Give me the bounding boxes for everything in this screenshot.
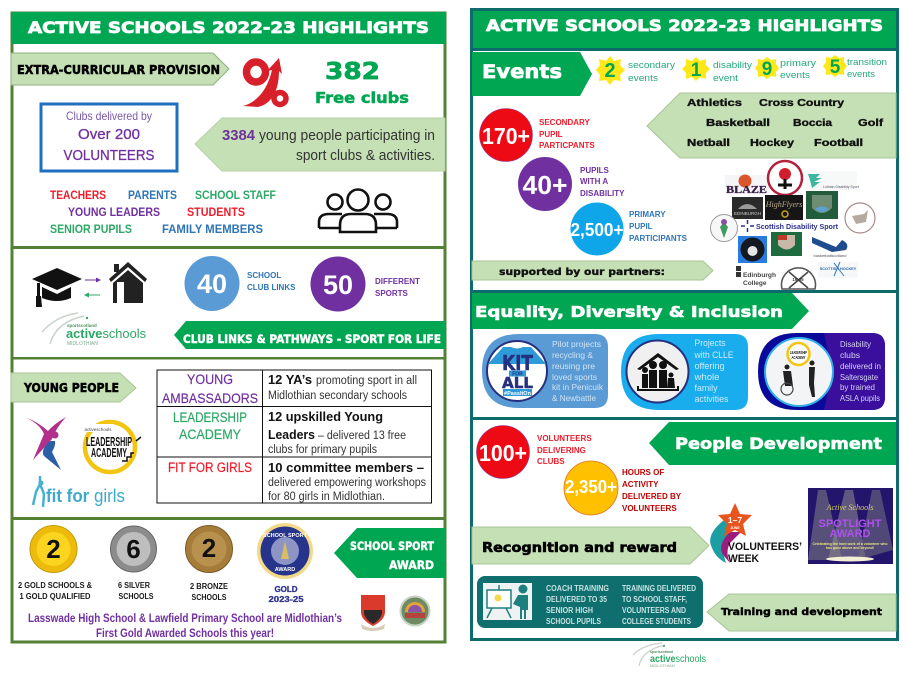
logo: volunteers week <box>710 503 802 565</box>
stat star: 9 primary events: primary <box>780 58 816 69</box>
divider band <box>11 357 446 360</box>
stat: 170+ secondary pupil participants <box>480 108 595 162</box>
stat star: 5 transition events: 5 <box>830 57 841 78</box>
logo: scottish hockey: SCOTTISH HOCKEY <box>820 267 857 271</box>
stat: 50 different sports: 50 <box>323 270 353 300</box>
logo: fit for girls: fit for girls <box>46 486 125 506</box>
heading arrow: school sport award: AWARD <box>389 558 434 572</box>
stat star: 5 transition events <box>823 55 887 80</box>
panel: club links and pathways <box>32 256 445 349</box>
logo: active schools midlothian: sportscotland <box>67 323 97 328</box>
heading arrow: young people <box>11 373 136 402</box>
card: kit for all: recycling & <box>552 350 593 360</box>
stat: 50 different sports: SPORTS <box>375 289 409 298</box>
stat star: 2 secondary events <box>596 56 675 85</box>
stat star: 2 secondary events: secondary <box>628 60 675 71</box>
logo: edinburgh college: Edinburgh <box>743 272 776 279</box>
logo: active schools footer: activeschools <box>650 654 706 665</box>
stat: 2,350+ hours of activity: ACTIVITY <box>622 480 659 489</box>
heading arrow: young people: YOUNG PEOPLE <box>23 381 119 395</box>
stat star: 1 disability event: 1 <box>691 60 702 81</box>
logo: basketball scotland <box>812 237 847 258</box>
card: kit for all: & Newbattle <box>552 393 596 403</box>
list: volunteer roles <box>50 190 276 236</box>
callout arrow: sports list <box>647 93 896 158</box>
row: leadership academy: clubs for primary pupils <box>268 444 377 456</box>
arrow: supported by our partners <box>472 261 713 280</box>
callout arrow: 3384 young people <box>195 118 445 171</box>
stat star: 5 transition events: events <box>847 69 875 80</box>
logo: active schools midlothian <box>42 313 146 347</box>
row: fit for girls: delivered empowering workshops <box>268 477 426 489</box>
stat: 2,350+ hours of activity <box>564 461 682 515</box>
image: spotlight award: Active Schools <box>826 503 873 512</box>
logo: high flyers: HighFlyers <box>765 200 802 209</box>
stat: 100+ volunteers delivering clubs: 100+ <box>479 440 527 466</box>
callout arrow: 3384 young people: sport clubs & activities. <box>296 148 435 164</box>
logo: volunteers week: JUNE <box>730 526 740 530</box>
callout arrow: 3384 young people: young people participating in <box>259 128 435 144</box>
medal labels: 2023-25 <box>268 595 304 604</box>
logo: blaze <box>725 174 770 196</box>
callout arrow: sports list: Athletics <box>687 98 743 109</box>
stat: 100+ volunteers delivering clubs: VOLUNTEERS <box>537 434 592 443</box>
card: training delivered: COACH TRAINING <box>546 584 609 593</box>
stat: 100+ volunteers delivering clubs: CLUBS <box>537 457 565 466</box>
badge: school sport award gold: AWARD <box>275 567 295 573</box>
statement: first gold awarded schools <box>28 611 342 640</box>
card: whole family activities: activities <box>694 394 729 404</box>
logo: basketball scotland: basketballscotland <box>814 253 846 258</box>
medal labels: 2 BRONZE <box>190 582 229 591</box>
panel: events <box>472 52 896 289</box>
callout: over 200 volunteers: VOLUNTEERS <box>64 147 154 164</box>
card: kit for all <box>482 334 608 408</box>
heading arrow: school sport award: SCHOOL SPORT <box>350 539 434 553</box>
row: leadership academy: LEADERSHIP <box>173 409 247 425</box>
medal: bronze <box>186 526 232 572</box>
partner logos <box>710 161 875 289</box>
arrow: supported by our partners: supported by our partners: <box>499 267 665 278</box>
left title banner <box>11 12 446 44</box>
stat: 2,500+ primary pupil participants: 2,500+ <box>570 220 624 240</box>
heading arrow: events: Events <box>482 61 562 83</box>
stat: 382 free clubs: Free clubs <box>315 89 409 107</box>
callout arrow: sports list: Basketball <box>706 118 770 129</box>
stat star: 9 primary events: events <box>780 70 810 81</box>
card: kit for all: Pilot projects <box>552 339 601 349</box>
logo: rose club <box>768 161 802 195</box>
medal labels: 2 GOLD SCHOOLS & <box>18 581 92 590</box>
logo: active schools midlothian: activeschools <box>66 326 146 341</box>
divider band <box>471 290 899 293</box>
crest: lawfield primary school <box>400 596 430 626</box>
card: kit for all: KIT <box>502 351 533 375</box>
card: kit for all: FOR <box>512 372 523 378</box>
stat: 2,500+ primary pupil participants: PRIMARY <box>629 210 666 219</box>
heading arrow: events <box>472 52 592 96</box>
image: spotlight award: Celebrating the hard work of a volunteer who <box>812 542 888 546</box>
logo: golf club circle <box>782 268 816 289</box>
logo: leadership academy: LEADERSHIP <box>86 434 132 449</box>
card: training delivered: COLLEGE STUDENTS <box>622 617 692 626</box>
card: disability clubs: Disability <box>840 339 872 349</box>
row: young ambassadors: AMBASSADORS <box>162 390 258 406</box>
stat: 170+ secondary pupil participants: PARTICPANTS <box>539 141 595 150</box>
panel: people development <box>472 422 896 631</box>
logo: active schools footer: MIDLOTHIAN <box>650 663 675 668</box>
stat: 2,500+ primary pupil participants <box>570 202 688 256</box>
stat: 382 free clubs: 382 <box>325 59 380 85</box>
medal: gold: 2 <box>46 534 61 564</box>
card: disability clubs: Saltersgate <box>840 372 878 382</box>
stat: 2,350+ hours of activity: HOURS OF <box>622 468 664 477</box>
heading arrow: club links and pathways: CLUB LINKS & PATHWAYS - SPORT FOR LIFE <box>183 332 441 346</box>
stat: 2,350+ hours of activity: DELIVERED BY <box>622 492 682 501</box>
icon: graduation cap <box>32 268 82 307</box>
right page <box>471 10 899 668</box>
heading arrow: school sport award <box>334 528 445 578</box>
left page <box>11 12 446 642</box>
list: volunteer roles: FAMILY MEMBERS <box>162 224 263 236</box>
stat: 2,500+ primary pupil participants: PUPIL <box>629 222 653 231</box>
callout arrow: 3384 young people: 3384 <box>222 128 255 144</box>
logo: football club <box>738 236 767 263</box>
row: young ambassadors: Midlothian secondary schools <box>268 390 407 402</box>
card: disability clubs <box>758 333 885 410</box>
logo: thistle circle <box>710 214 738 242</box>
logo: green hockey crest <box>806 191 838 219</box>
divider band <box>471 417 899 420</box>
heading arrow: people development: People Development <box>675 434 882 453</box>
logo: edinburgh college <box>736 266 776 287</box>
logo: deer circle <box>845 203 875 233</box>
row: fit for girls <box>168 460 426 503</box>
stat: 50 different sports <box>310 256 420 312</box>
logo: green shield crest <box>771 232 802 256</box>
arrows between school and club <box>84 278 101 298</box>
panel: extra-curricular provision <box>11 53 445 236</box>
logo: scottish hockey <box>818 262 858 278</box>
card: training delivered <box>477 576 703 628</box>
row: fit for girls: FIT FOR GIRLS <box>168 460 252 475</box>
logo: active schools footer <box>633 643 706 668</box>
list: volunteer roles: TEACHERS <box>50 190 106 202</box>
stat: 2,350+ hours of activity: 2,350+ <box>565 477 617 497</box>
logo: edinburgh dark <box>732 197 763 219</box>
row: leadership academy: – delivered 13 free <box>318 430 406 442</box>
logo: edinburgh college: College <box>743 280 767 287</box>
logo: scottish disability sport: Scottish Disability Sport <box>756 224 839 231</box>
row: leadership academy: ACADEMY <box>179 426 242 442</box>
medal labels: SCHOOLS <box>118 592 154 601</box>
stat: 40 school club links: CLUB LINKS <box>247 283 296 292</box>
heading arrow: extra-curricular provision <box>11 53 229 85</box>
stat star: 2 secondary events: events <box>628 73 658 84</box>
panel: equality diversity and inclusion <box>472 293 885 410</box>
card: disability clubs: delivered in <box>840 361 881 371</box>
card: disability clubs: LEADERSHIP <box>790 350 807 355</box>
logo: volunteers week: 1–7 <box>728 515 742 525</box>
card: disability clubs: clubs <box>840 350 860 360</box>
row: fit for girls: for 80 girls in Midlothian. <box>268 491 385 503</box>
stat star: 9 primary events: 9 <box>762 59 772 80</box>
logo: edinburgh dark: EDINBURGH <box>734 211 761 216</box>
icon: red percent with arrow <box>243 58 286 107</box>
logo: scottish disability sport <box>741 220 839 232</box>
heading arrow: people development <box>649 422 896 465</box>
stat: 40 school club links: SCHOOL <box>247 271 281 280</box>
statement: first gold awarded schools: First Gold Awarded Schools this year! <box>96 626 274 640</box>
logo: leadership academy: activeschools <box>84 427 112 432</box>
stat: 2,500+ primary pupil participants: PARTICIPANTS <box>629 234 688 243</box>
logo: lothian disability sport <box>806 171 859 190</box>
heading arrow: equality diversity and inclusion <box>472 293 809 329</box>
image: spotlight award <box>808 488 893 564</box>
card: kit for all: ALL <box>502 374 533 392</box>
panel: school sport award <box>18 523 445 640</box>
heading arrow: training and development: Training and development <box>721 607 882 618</box>
row: leadership academy: Leaders <box>268 428 315 442</box>
callout: over 200 volunteers <box>41 104 177 171</box>
icon: young ambassadors figures <box>25 417 66 470</box>
callout arrow: sports list: Football <box>814 138 863 149</box>
icon: wheelchair athlete <box>781 364 793 395</box>
crest: lasswade high school <box>361 595 385 631</box>
badge: school sport award gold <box>257 523 313 579</box>
stat: 40 school club links <box>184 256 296 311</box>
list: volunteer roles: PARENTS <box>128 190 177 202</box>
stat: 170+ secondary pupil participants: PUPIL <box>539 130 563 139</box>
callout: over 200 volunteers: Clubs delivered by <box>66 109 152 123</box>
stat star: 1 disability event: event <box>713 73 738 84</box>
logo: high flyers <box>765 195 803 220</box>
stat: 100+ volunteers delivering clubs <box>476 426 592 478</box>
card: training delivered: TRAINING DELIVERED <box>622 584 696 593</box>
row: leadership academy: 12 upskilled Young <box>268 410 383 424</box>
statement: first gold awarded schools: Lasswade High School & Lawfield Primary School are Midlothian’s <box>28 611 342 625</box>
callout arrow: sports list: Hockey <box>750 138 795 149</box>
card: training delivered: DELIVERED TO 35 <box>546 595 607 604</box>
card: kit for all: loved sports <box>552 372 597 382</box>
heading arrow: equality diversity and inclusion: Equality, Diversity & Inclusion <box>475 303 783 321</box>
stat star: 9 primary events <box>755 57 816 81</box>
heading arrow: extra-curricular provision: EXTRA-CURRICULAR PROVISION <box>17 62 220 77</box>
medal: silver <box>110 526 156 572</box>
medal labels <box>18 581 304 604</box>
card: training delivered: TO SCHOOL STAFF, <box>622 595 687 604</box>
stat: 170+ secondary pupil participants: SECONDARY <box>539 118 590 127</box>
icon: house <box>109 262 147 303</box>
stat: 382 free clubs <box>315 59 409 107</box>
medal: bronze: 2 <box>202 533 216 563</box>
stat: 50 different sports: DIFFERENT <box>375 277 420 286</box>
row: fit for girls: 10 committee members – <box>268 461 424 475</box>
logo: leadership academy: ACADEMY <box>91 445 127 460</box>
divider band <box>11 246 446 249</box>
list: volunteer roles: STUDENTS <box>187 207 245 219</box>
stat: 170+ secondary pupil participants: 170+ <box>482 123 530 149</box>
card: whole family activities: family <box>694 383 718 393</box>
callout arrow: sports list: Cross Country <box>759 98 845 109</box>
medal labels: GOLD <box>274 585 298 594</box>
card: kit for all: #PassItOn <box>504 391 532 397</box>
logo: golf club circle: 19 05 <box>792 277 804 282</box>
stat: 40 school club links: 40 <box>197 269 227 299</box>
right page frame <box>472 10 898 640</box>
row: young ambassadors: YOUNG <box>187 371 233 387</box>
list: volunteer roles: YOUNG LEADERS <box>68 207 160 219</box>
stat: 2,350+ hours of activity: VOLUNTEERS <box>622 504 677 513</box>
panel: young people <box>11 370 432 507</box>
left page frame <box>12 13 445 642</box>
stat: 40+ pupils with a disability: 40+ <box>522 170 568 200</box>
image: spotlight award: has gone above and beyond! <box>826 546 874 550</box>
medal: silver: 6 <box>126 534 141 564</box>
logo: active schools midlothian: MIDLOTHIAN <box>67 341 98 347</box>
card: training delivered: SENIOR HIGH <box>546 606 593 615</box>
medal labels: 6 SILVER <box>118 581 150 590</box>
logo: leadership academy <box>84 422 141 472</box>
icon: standing athlete <box>809 360 815 397</box>
stat star: 1 disability event: disability <box>713 60 752 71</box>
logo: blaze: BLAZE <box>726 185 767 196</box>
heading arrow: recognition and reward: Recognition and reward <box>482 541 677 556</box>
callout arrow: sports list: Golf <box>858 118 884 129</box>
card: whole family activities: Projects <box>694 338 726 348</box>
row: leadership academy <box>173 409 406 456</box>
card: disability clubs: ASLA pupils <box>840 393 880 403</box>
divider band <box>11 517 446 520</box>
card: whole family activities: offering <box>694 361 724 371</box>
card: training delivered: SCHOOL PUPILS <box>546 617 602 626</box>
heading arrow: training and development <box>707 594 896 631</box>
card: whole family activities: whole <box>693 372 720 382</box>
left title banner: ACTIVE SCHOOLS 2022-23 HIGHLIGHTS <box>28 18 429 37</box>
image: spotlight award: AWARD <box>830 528 871 540</box>
stat: 40+ pupils with a disability: DISABILITY <box>580 189 625 198</box>
card: disability clubs: ACADEMY <box>792 355 806 360</box>
card: kit for all: kit in Penicuik <box>552 382 604 392</box>
right title banner <box>471 11 899 51</box>
card: whole family activities: with CLLE <box>694 350 734 360</box>
stat star: 5 transition events: transition <box>847 57 887 68</box>
icon: coach at whiteboard <box>483 583 532 620</box>
row: young ambassadors: 12 YA’s <box>268 373 312 387</box>
right title banner: ACTIVE SCHOOLS 2022-23 HIGHLIGHTS <box>486 16 883 35</box>
list: volunteer roles: SCHOOL STAFF <box>195 190 276 202</box>
stat: 100+ volunteers delivering clubs: DELIVERING <box>537 446 586 455</box>
card: kit for all: reusing pre <box>552 361 595 371</box>
medal labels: SCHOOLS <box>192 593 227 602</box>
callout arrow: sports list: Boccia <box>793 118 833 129</box>
card: training delivered: VOLUNTEERS AND <box>622 606 686 615</box>
stat: 40+ pupils with a disability: PUPILS <box>580 166 610 175</box>
stat: 40+ pupils with a disability <box>518 157 625 211</box>
image: spotlight award: SPOTLIGHT <box>819 518 882 530</box>
list: volunteer roles: SENIOR PUPILS <box>50 224 132 236</box>
callout: over 200 volunteers: Over 200 <box>78 126 140 143</box>
stat star: 1 disability event <box>682 57 752 84</box>
row: young ambassadors <box>162 371 417 406</box>
logo: fit for girls <box>33 476 125 507</box>
logo: volunteers week: WEEK <box>728 553 759 565</box>
heading arrow: club links and pathways <box>174 321 445 349</box>
icon: group of people <box>319 190 397 232</box>
table: young people programmes <box>157 370 432 503</box>
medal: gold <box>30 526 77 572</box>
logo: volunteers week: VOLUNTEERS’ <box>728 541 802 553</box>
medal labels: 1 GOLD QUALIFIED <box>20 592 91 601</box>
badge: school sport award gold: SCHOOL SPORT <box>263 533 308 539</box>
logo: lothian disability sport: Lothian Disability Sport <box>823 185 859 189</box>
row: young ambassadors: promoting sport in all <box>316 375 417 387</box>
card: whole family activities <box>621 334 748 410</box>
callout arrow: sports list: Netball <box>687 138 730 149</box>
logo: active schools footer: sportscotland <box>650 650 673 654</box>
card: disability clubs: by trained <box>840 382 875 392</box>
stat star: 2 secondary events: 2 <box>604 60 616 82</box>
stat: 40+ pupils with a disability: WITH A <box>580 177 608 186</box>
heading arrow: recognition and reward <box>472 527 709 564</box>
